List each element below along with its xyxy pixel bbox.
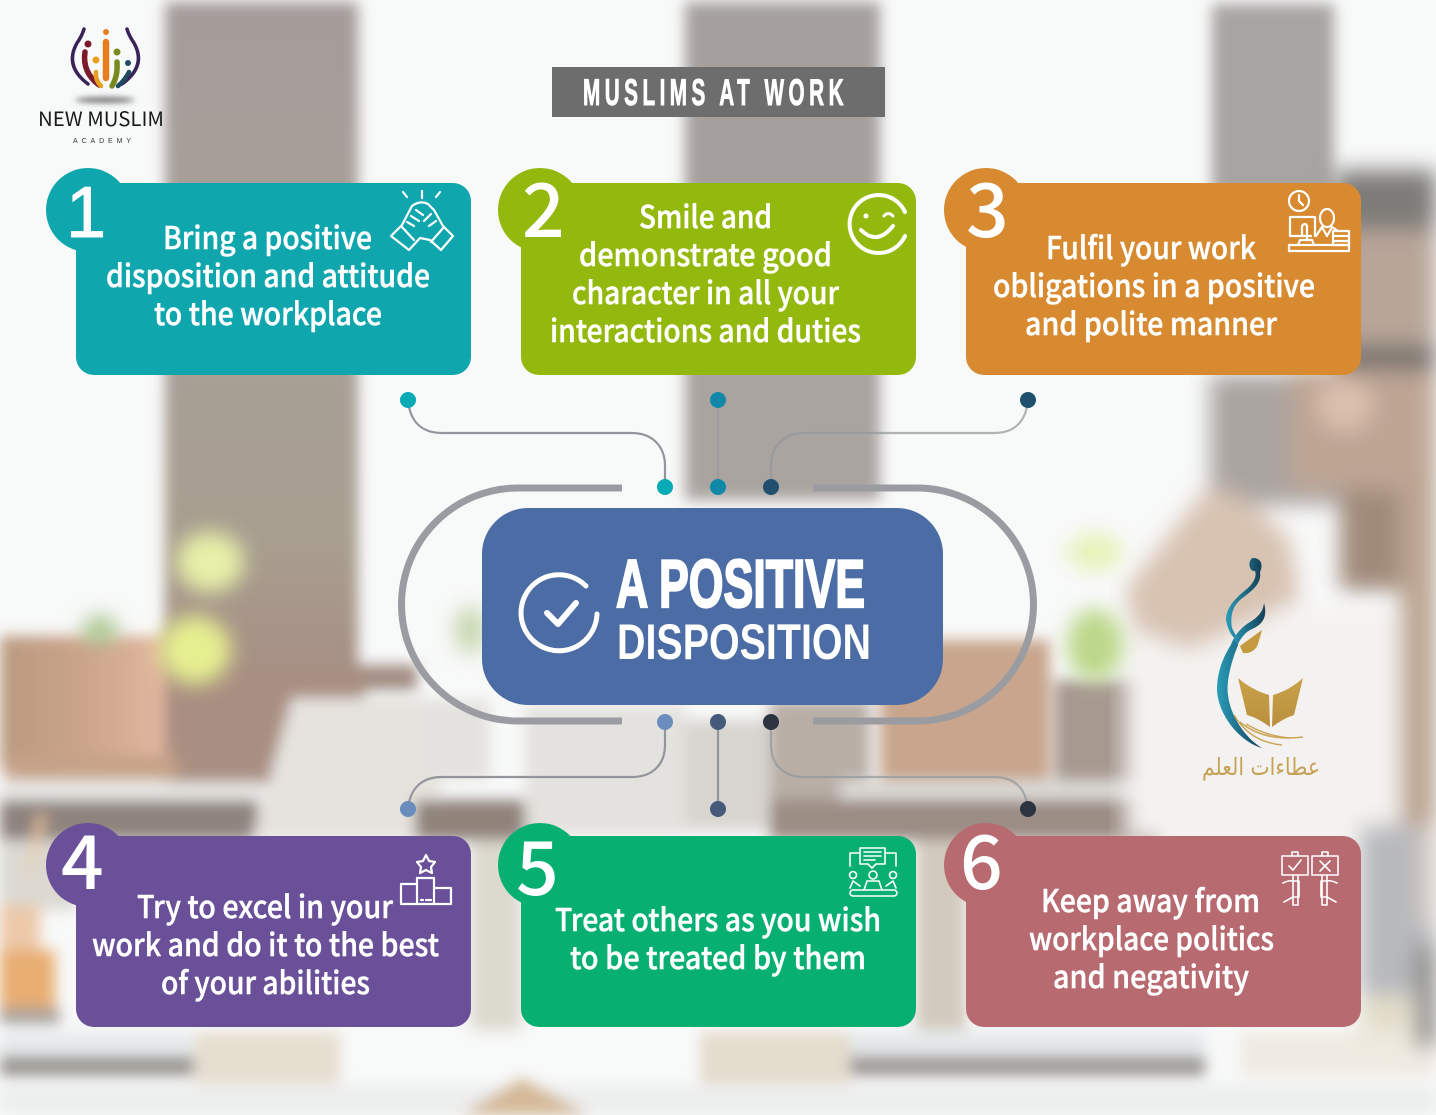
text: card 2: interactions and duties — [550, 306, 861, 351]
text: card 2: character in all your — [572, 268, 839, 313]
text: card 5: Treat others as you wish — [555, 895, 881, 940]
number 1: 1 — [66, 173, 106, 253]
logo subtitle: ACADEMY — [73, 138, 131, 145]
panel 2: smile and good character — [498, 150, 916, 375]
connector lines — [408, 400, 1028, 809]
text: card 2 — [550, 192, 861, 351]
title bar: MUSLIMS AT WORK — [583, 72, 848, 113]
panel 6: avoid politics — [944, 802, 1361, 1027]
heading: disposition: DISPOSITION — [617, 614, 871, 670]
text: card 5 — [555, 895, 881, 978]
logo: knowledge pen and book — [1202, 558, 1320, 781]
number 6: 6 — [960, 802, 1003, 911]
logo: new muslim academy — [38, 29, 164, 145]
heading: a positive: A POSITIVE — [616, 546, 865, 622]
logo wordmark: NEW MUSLIM — [38, 103, 164, 132]
central panel: a positive disposition — [482, 508, 943, 705]
text: card 1: Bring a positive — [163, 213, 372, 258]
text: card 3: and polite manner — [1025, 299, 1277, 344]
text: card 4 — [92, 882, 439, 1003]
outer pill frame — [402, 488, 1034, 721]
panel 1: positive attitude — [46, 168, 471, 375]
logo: arabic name: عطاءات العلم — [1202, 753, 1320, 781]
text: card 3: Fulfil your work — [1046, 223, 1256, 268]
title bar — [552, 67, 885, 117]
text: card 1: disposition and attitude — [106, 251, 430, 296]
text: card 6: workplace politics — [1029, 914, 1274, 959]
text: card 4: work and do it to the best — [92, 920, 439, 965]
text: card 6 — [1029, 876, 1274, 997]
icon: worker at desk with clock — [1289, 191, 1349, 251]
icon: smiley face — [850, 195, 905, 253]
text: card 1: to the workplace — [154, 289, 382, 334]
text: card 6: Keep away from — [1041, 876, 1260, 921]
text: card 5: to be treated by them — [570, 933, 866, 978]
number 3: 3 — [966, 150, 1009, 259]
connector dots — [400, 392, 1036, 817]
number 2: 2 — [522, 150, 565, 259]
number 4: 4 — [61, 802, 104, 911]
text: card 4: of your abilities — [161, 958, 370, 1003]
icon: meeting with speech bubbles — [850, 848, 897, 896]
text: card 4: Try to excel in your — [137, 882, 393, 927]
number 5: 5 — [516, 808, 559, 917]
panel 3: fulfil obligations — [944, 150, 1361, 375]
text: card 6: and negativity — [1053, 952, 1249, 997]
icon: check mark in circle — [521, 575, 597, 651]
text: card 2: demonstrate good — [579, 230, 832, 275]
icon: podium with star — [401, 855, 451, 904]
icon: protest signs — [1282, 852, 1338, 905]
text: card 2: Smile and — [639, 192, 772, 237]
text: card 1 — [106, 213, 430, 334]
text: card 3: obligations in a positive — [993, 261, 1315, 306]
panel 4: excel in work — [46, 802, 471, 1027]
icon: clasped hands — [391, 191, 453, 250]
text: card 3 — [993, 223, 1315, 344]
panel 5: treat others — [498, 808, 916, 1027]
